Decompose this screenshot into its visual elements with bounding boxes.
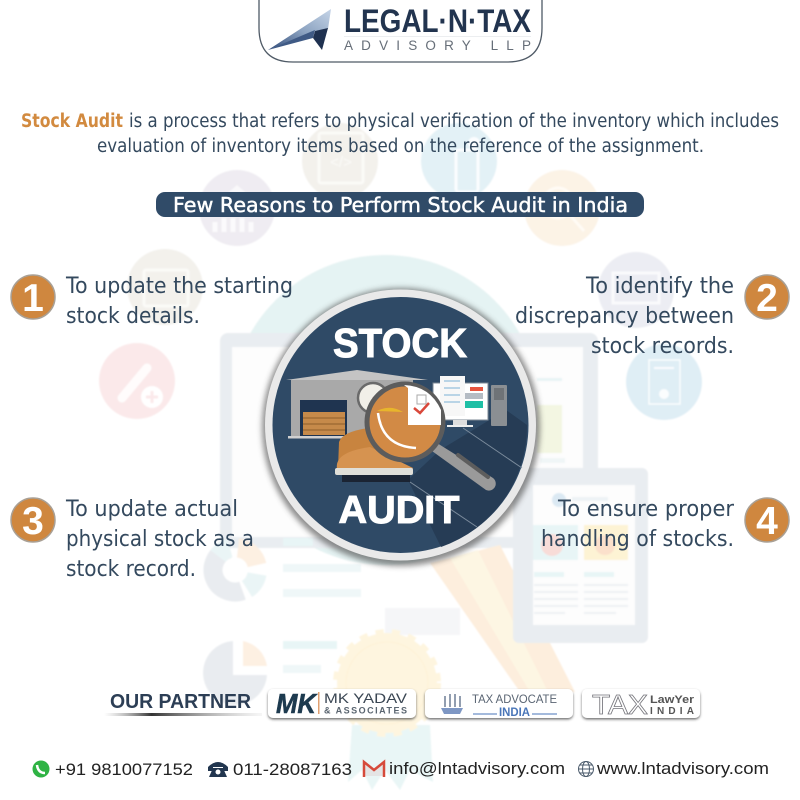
partner label: OUR PARTNER [110, 691, 252, 713]
seal title top: STOCK [333, 320, 467, 366]
partner logo: Tax Lawyer India [582, 689, 700, 720]
contact bar [32, 759, 769, 779]
reason 3 [11, 497, 254, 582]
reason 3: physical stock as a [66, 527, 254, 552]
document panel [513, 468, 648, 643]
partner logo: MK Yadav [268, 688, 416, 719]
pie chart watermark [203, 641, 267, 705]
pale text bars [283, 538, 460, 673]
phone number: +91 9810077152 [55, 760, 193, 779]
partner logo: MK Yadav: MK YADAV [324, 690, 408, 706]
landline: 011-28087163 [233, 760, 352, 779]
icon: whatsapp [32, 760, 50, 778]
intro text: evaluation of inventory items based on the reference of the assignment. [97, 136, 704, 157]
icon: globe [578, 762, 594, 776]
reason 1: stock details. [66, 304, 200, 329]
large monitor [220, 333, 598, 548]
badge 4: 4 [756, 500, 778, 543]
sacks on pallet [335, 428, 413, 482]
reason 4: handling of stocks. [541, 527, 734, 552]
intro text [21, 111, 779, 157]
badge circles: </> [330, 154, 352, 171]
badge 2: 2 [756, 277, 778, 320]
badge 3 [11, 498, 55, 543]
reason 1: To update the starting [65, 274, 293, 299]
badge 2 [745, 275, 789, 320]
badge 1 [11, 275, 55, 320]
rosette seal [337, 633, 437, 733]
intro text: Stock Audit [21, 111, 123, 132]
donut chart watermark [207, 542, 263, 598]
logo subline: ADVISORY LLP [344, 38, 531, 53]
logo icon: arrowhead [268, 9, 331, 50]
partner logo: Tax Lawyer India: TAX [592, 689, 648, 720]
logo plate [259, 0, 542, 62]
logo wordmark: LEGAL·N·TAX [344, 3, 532, 39]
partner logo: Tax Lawyer India: INDIA [650, 706, 694, 717]
badge 3: 3 [22, 500, 44, 543]
partner logo: MK Yadav: & ASSOCIATES [324, 706, 407, 716]
magnifying glass [367, 384, 496, 491]
badge 1: 1 [22, 277, 44, 320]
long shadow [408, 410, 527, 547]
giant magnifier handle [430, 545, 575, 692]
section heading pill: Few Reasons to Perform Stock Audit in India [173, 193, 628, 217]
website: www.lntadvisory.com [596, 759, 769, 778]
reason 2: stock records. [591, 334, 734, 359]
reason 1 [11, 274, 293, 329]
teal arc behind the seal [230, 255, 540, 565]
partner logo: Tax Lawyer India: LawYer [650, 694, 695, 706]
partner logo: Tax Advocate India: TAX ADVOCATE [472, 692, 557, 706]
email: info@lntadvisory.com [389, 759, 565, 778]
warehouse [286, 370, 428, 438]
reason 3: To update actual [65, 497, 238, 522]
stopwatch [358, 383, 388, 413]
reason 3: stock record. [66, 557, 196, 582]
partner logo: Tax Advocate India: INDIA [499, 705, 530, 719]
rosette ribbon [348, 725, 433, 790]
reason 4: To ensure proper [557, 497, 735, 522]
reason 2: To identify the [585, 274, 734, 299]
icon: telephone [208, 762, 228, 777]
partner logo: Tax Advocate India [425, 689, 573, 719]
reason 4 [541, 497, 789, 552]
partner logo: MK Yadav: MK [276, 688, 318, 719]
reason 2 [515, 274, 789, 359]
reason 2: discrepancy between [515, 304, 734, 329]
icon: mail [364, 762, 384, 777]
seal title bottom: AUDIT [338, 489, 460, 532]
badge 4 [745, 498, 789, 543]
computer [433, 376, 507, 427]
central seal [262, 288, 540, 566]
badge circles [99, 123, 702, 420]
